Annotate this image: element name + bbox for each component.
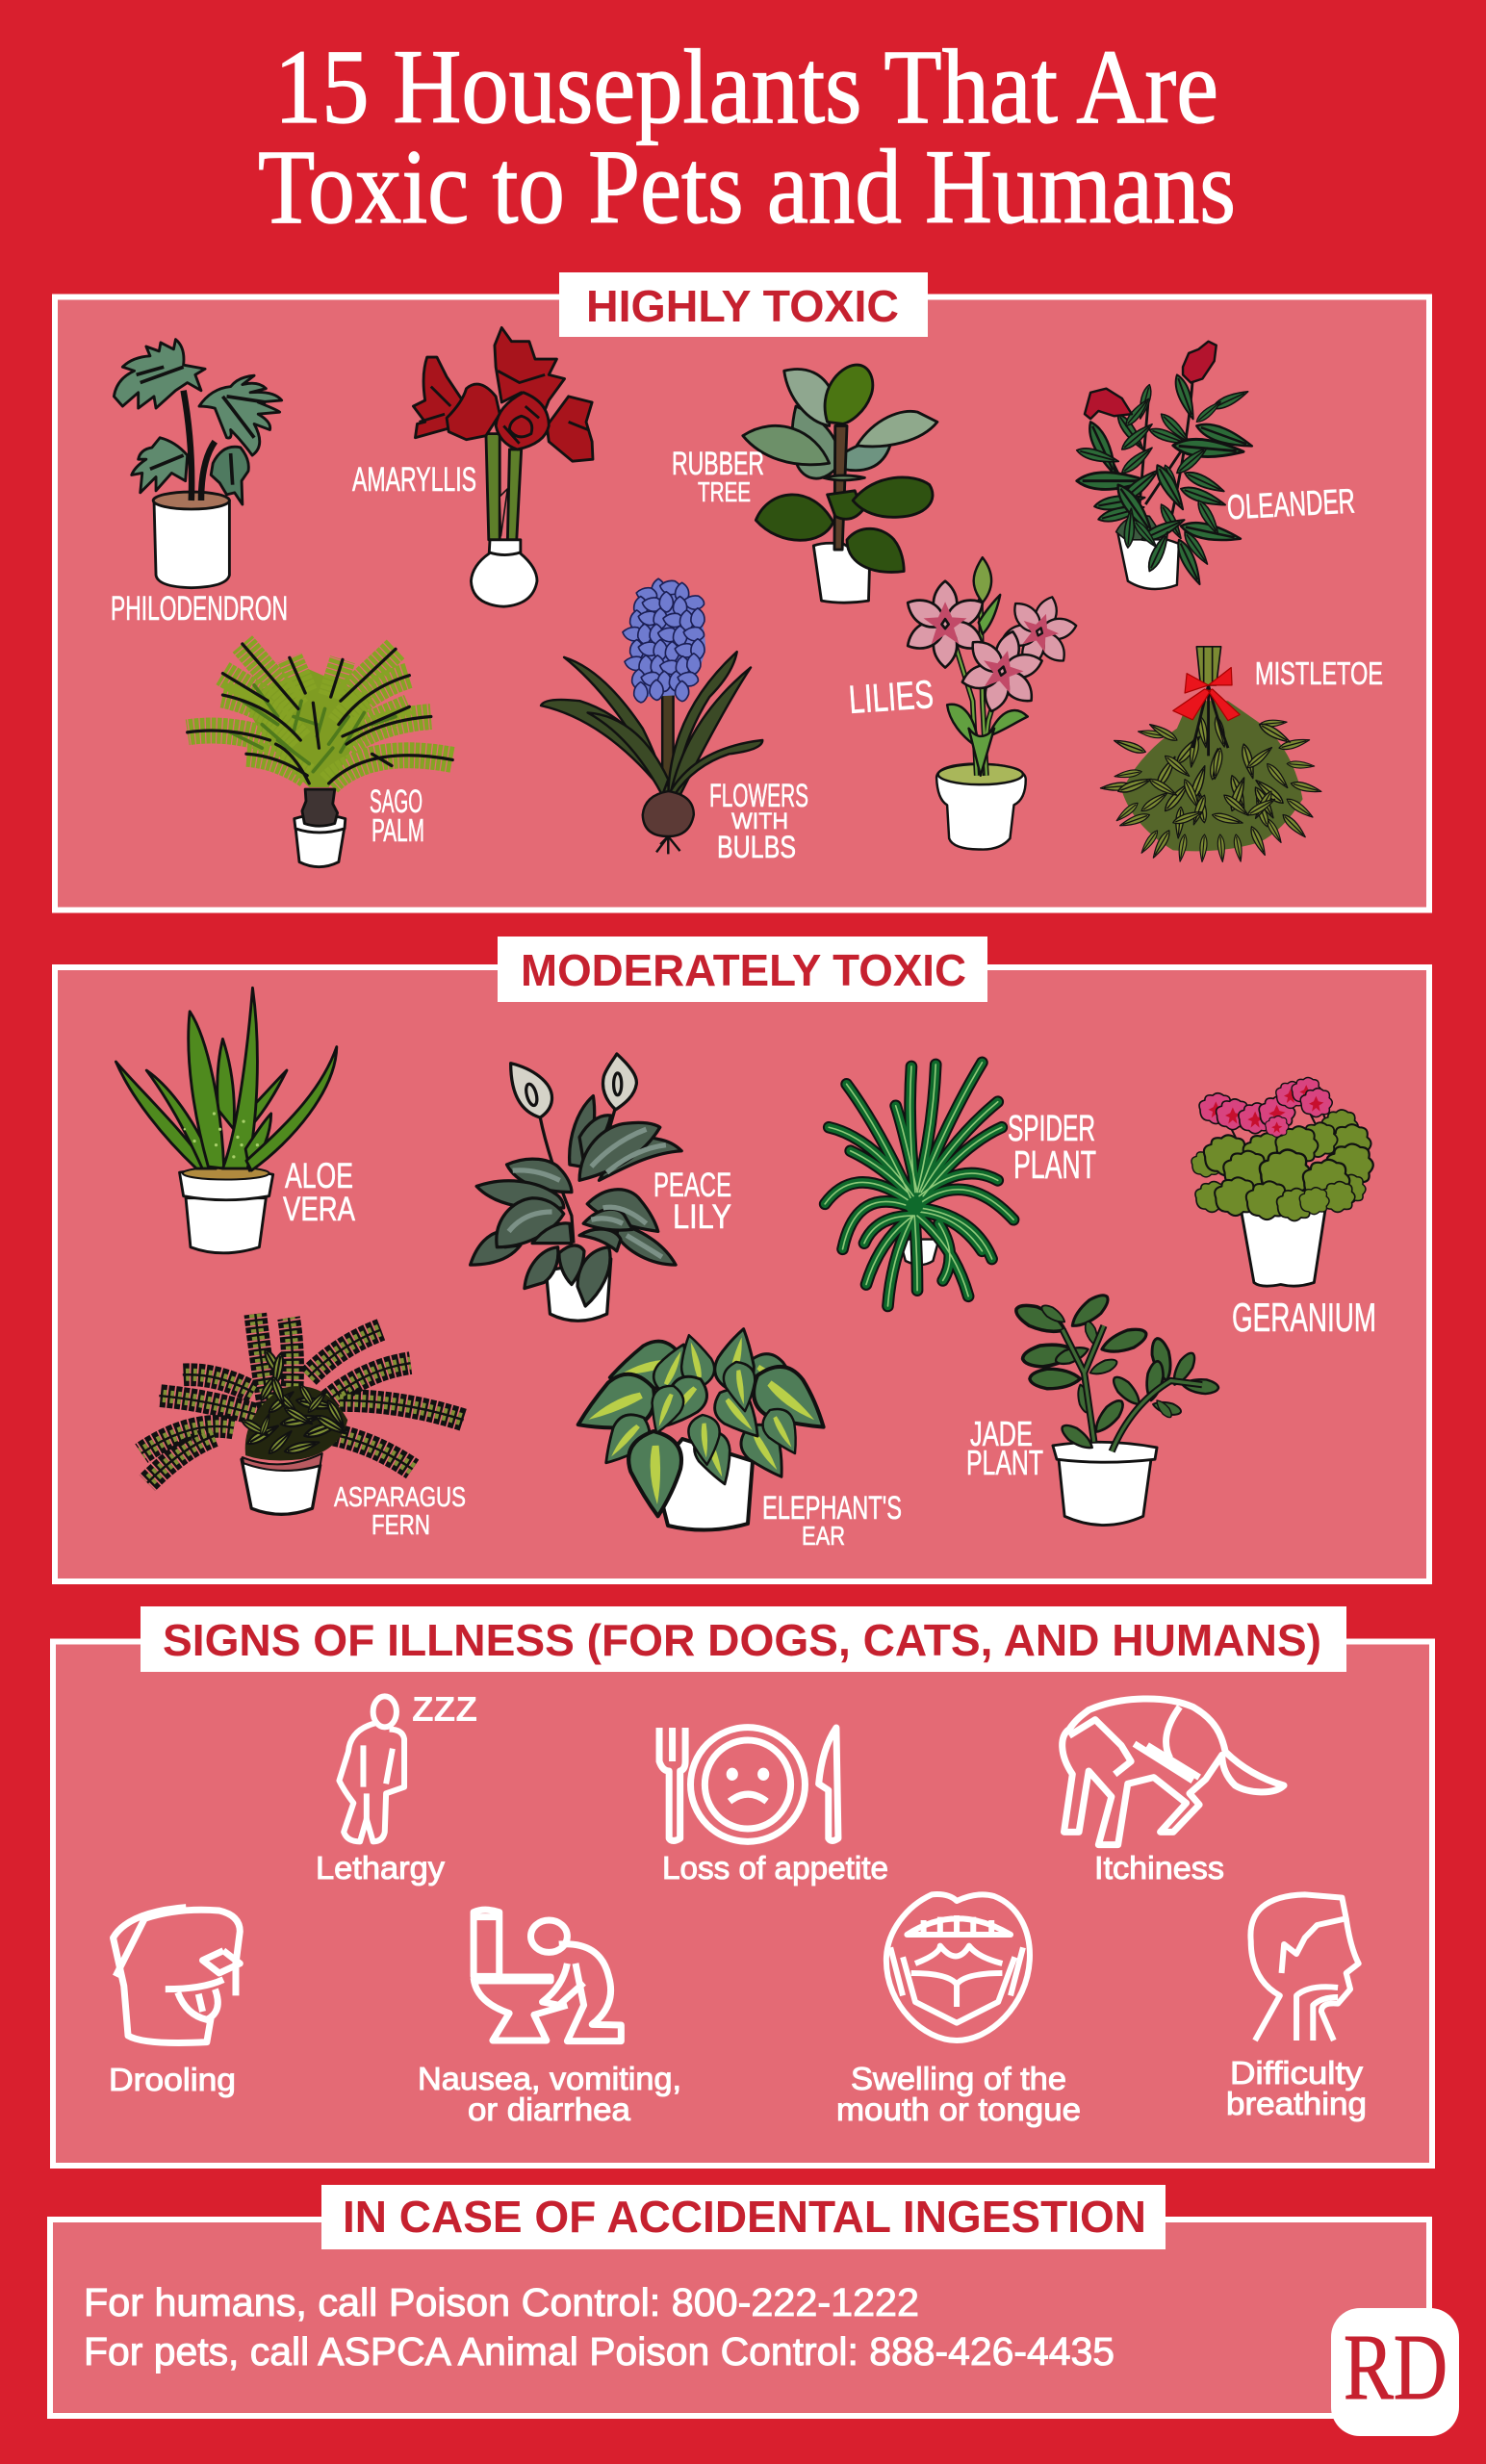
label: rubber tree: TREE (698, 477, 751, 508)
label: flowers with bulbs: FLOWERS (709, 778, 808, 814)
title: 15 Houseplants That Are (274, 28, 1218, 145)
label: difficulty breathing (1226, 2055, 1367, 2121)
panel: highly toxic (55, 272, 1429, 911)
plant: asparagus fern (141, 1314, 464, 1514)
plant: flowers with bulbs (541, 578, 762, 854)
label: asparagus fern (334, 1482, 466, 1541)
label: spider plant: SPIDER (1008, 1109, 1095, 1149)
label: jade plant: JADE (970, 1414, 1033, 1453)
plant: philodendron (114, 340, 282, 588)
label: philodendron: PHILODENDRON (111, 590, 288, 628)
plant: elephant's ear (567, 1324, 839, 1530)
label: swelling (836, 2061, 1081, 2127)
label: flowers with bulbs (709, 778, 808, 864)
label: aloe vera (283, 1156, 356, 1228)
label: asparagus fern: FERN (372, 1510, 430, 1541)
label: elephant's ear (762, 1490, 902, 1551)
label: sago palm: SAGO (370, 783, 423, 820)
panel: signs of illness: SIGNS OF ILLNESS (FOR DOGS, CATS, AND HUMANS) (163, 1615, 1321, 1665)
label: jade plant: PLANT (966, 1443, 1043, 1482)
panel: accidental ingestion (50, 2185, 1429, 2416)
plant: oleander (1075, 342, 1254, 589)
label: nausea (418, 2061, 681, 2127)
label: oleander: OLEANDER (1226, 480, 1356, 526)
plant: mistletoe (1100, 647, 1322, 862)
label: flowers with bulbs: WITH (731, 808, 788, 834)
label: sago palm (370, 783, 424, 848)
label: mistletoe: MISTLETOE (1255, 655, 1383, 691)
label: geranium: GERANIUM (1232, 1295, 1376, 1340)
icon: nausea (474, 1910, 621, 2041)
label: spider plant: PLANT (1013, 1142, 1096, 1187)
label: difficulty breathing: breathing (1226, 2086, 1367, 2121)
icon: zzz: ZZZ (412, 1689, 477, 1729)
label: elephant's ear: EAR (802, 1521, 845, 1551)
label: swelling: mouth or tongue (836, 2092, 1081, 2127)
panel: signs of illness (53, 1606, 1432, 2166)
label: difficulty breathing: Difficulty (1230, 2055, 1364, 2091)
plant: peace lily (471, 1054, 681, 1321)
logo: RD (1331, 2308, 1459, 2436)
plant: geranium (1191, 1077, 1373, 1286)
label: jade plant (966, 1414, 1043, 1482)
title (258, 28, 1236, 245)
label: aloe vera: VERA (283, 1191, 356, 1228)
label: swelling: Swelling of the (851, 2061, 1066, 2096)
label: lethargy: Lethargy (316, 1850, 446, 1886)
icon: swelling (886, 1894, 1030, 2040)
icon: itchiness (1063, 1699, 1284, 1845)
contact text: For pets, call ASPCA Animal Poison Control: 888-426-4435 (84, 2329, 1114, 2374)
logo: RD: RD (1344, 2316, 1448, 2420)
icon: loss of appetite (659, 1728, 838, 1841)
label: peace lily: PEACE (653, 1167, 731, 1204)
icon: drooling (114, 1908, 240, 2042)
label: rubber tree: RUBBER (672, 446, 764, 482)
panel: highly toxic: HIGHLY TOXIC (586, 281, 899, 331)
label: drooling: Drooling (109, 2062, 236, 2097)
plant: lilies (902, 557, 1088, 850)
label: nausea: or diarrhea (468, 2092, 631, 2127)
label: flowers with bulbs: BULBS (717, 830, 796, 864)
label: sago palm: PALM (372, 812, 424, 848)
icon: difficulty breathing (1250, 1894, 1359, 2040)
plant: rubber tree (743, 365, 937, 603)
label: peace lily: LILY (673, 1198, 731, 1236)
plant: jade plant (1012, 1290, 1219, 1526)
label: lilies: LILIES (847, 672, 935, 722)
panel: moderately toxic: MODERATELY TOXIC (521, 945, 966, 995)
contact text (84, 2280, 1114, 2374)
label: rubber tree (672, 446, 764, 508)
plant: sago palm (188, 644, 452, 867)
label: asparagus fern: ASPARAGUS (334, 1482, 466, 1513)
plant: spider plant (825, 1063, 1013, 1306)
label: peace lily (653, 1167, 731, 1236)
label: elephant's ear: ELEPHANT'S (762, 1490, 902, 1527)
label: amaryllis: AMARYLLIS (352, 461, 476, 499)
panel: accidental ingestion: IN CASE OF ACCIDENTAL INGESTION (343, 2192, 1146, 2242)
panel: moderately toxic (55, 937, 1429, 1581)
plant: amaryllis (413, 327, 593, 606)
label: itchiness: Itchiness (1094, 1850, 1224, 1886)
icon: lethargy (339, 1696, 404, 1841)
label: spider plant (1008, 1109, 1096, 1187)
label: aloe vera: ALOE (285, 1156, 353, 1195)
label: nausea: Nausea, vomiting, (418, 2061, 681, 2096)
plant: aloe vera (115, 988, 337, 1253)
title: Toxic to Pets and Humans (258, 128, 1236, 245)
label: loss of appetite: Loss of appetite (662, 1850, 888, 1886)
contact text: For humans, call Poison Control: 800-222-1222 (84, 2280, 919, 2324)
